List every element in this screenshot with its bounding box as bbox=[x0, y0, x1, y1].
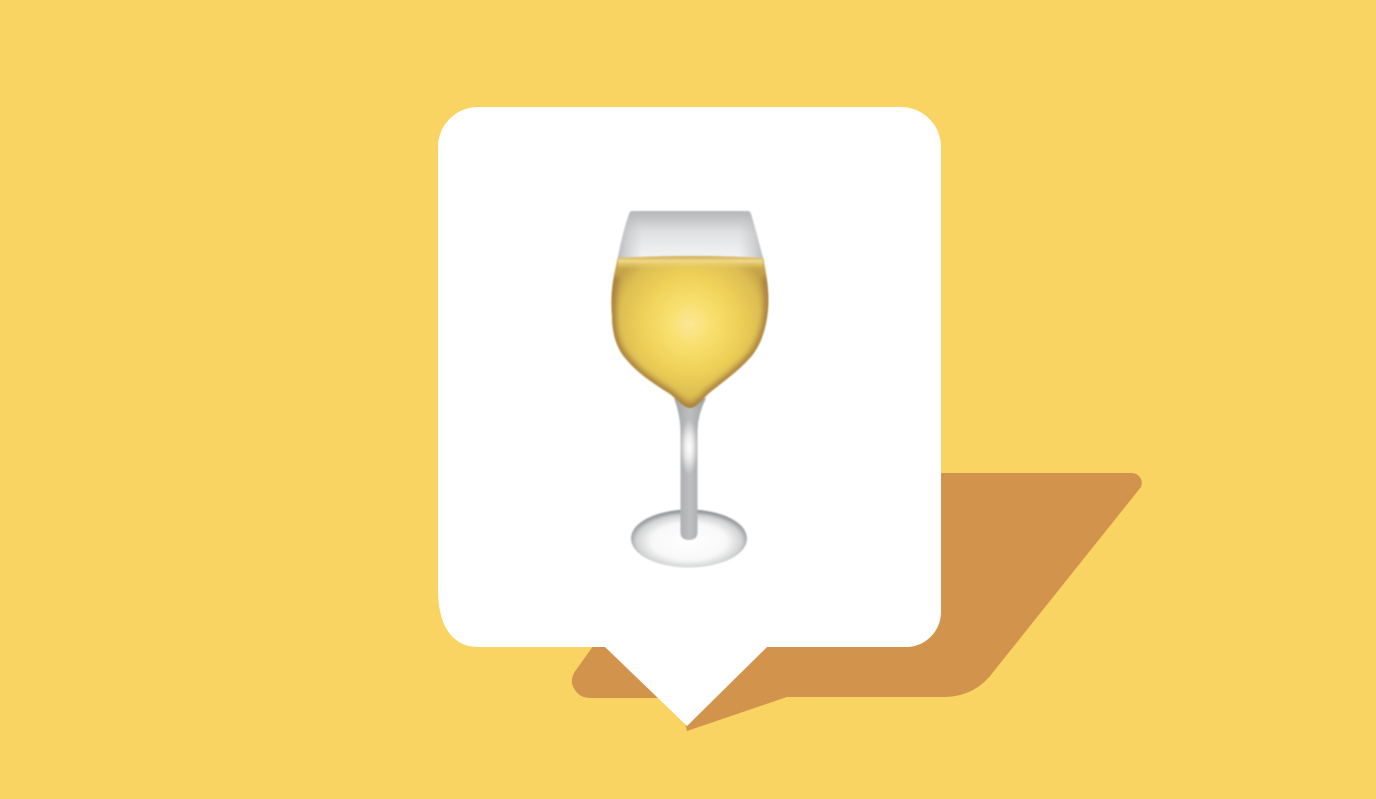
white pin: speech bubble bbox=[438, 107, 941, 726]
white wine in bowl bbox=[610, 255, 770, 409]
illustration: wine glass pin on yellow background bbox=[438, 107, 1142, 731]
long cast shadow of the pin bbox=[572, 473, 1142, 731]
darker wine edge bbox=[612, 276, 768, 408]
glass stem bbox=[674, 398, 706, 540]
glass base bbox=[631, 510, 747, 568]
wine surface highlight bbox=[617, 256, 764, 268]
icon: wine glass bbox=[610, 210, 770, 568]
empty upper bowl bbox=[617, 211, 764, 262]
